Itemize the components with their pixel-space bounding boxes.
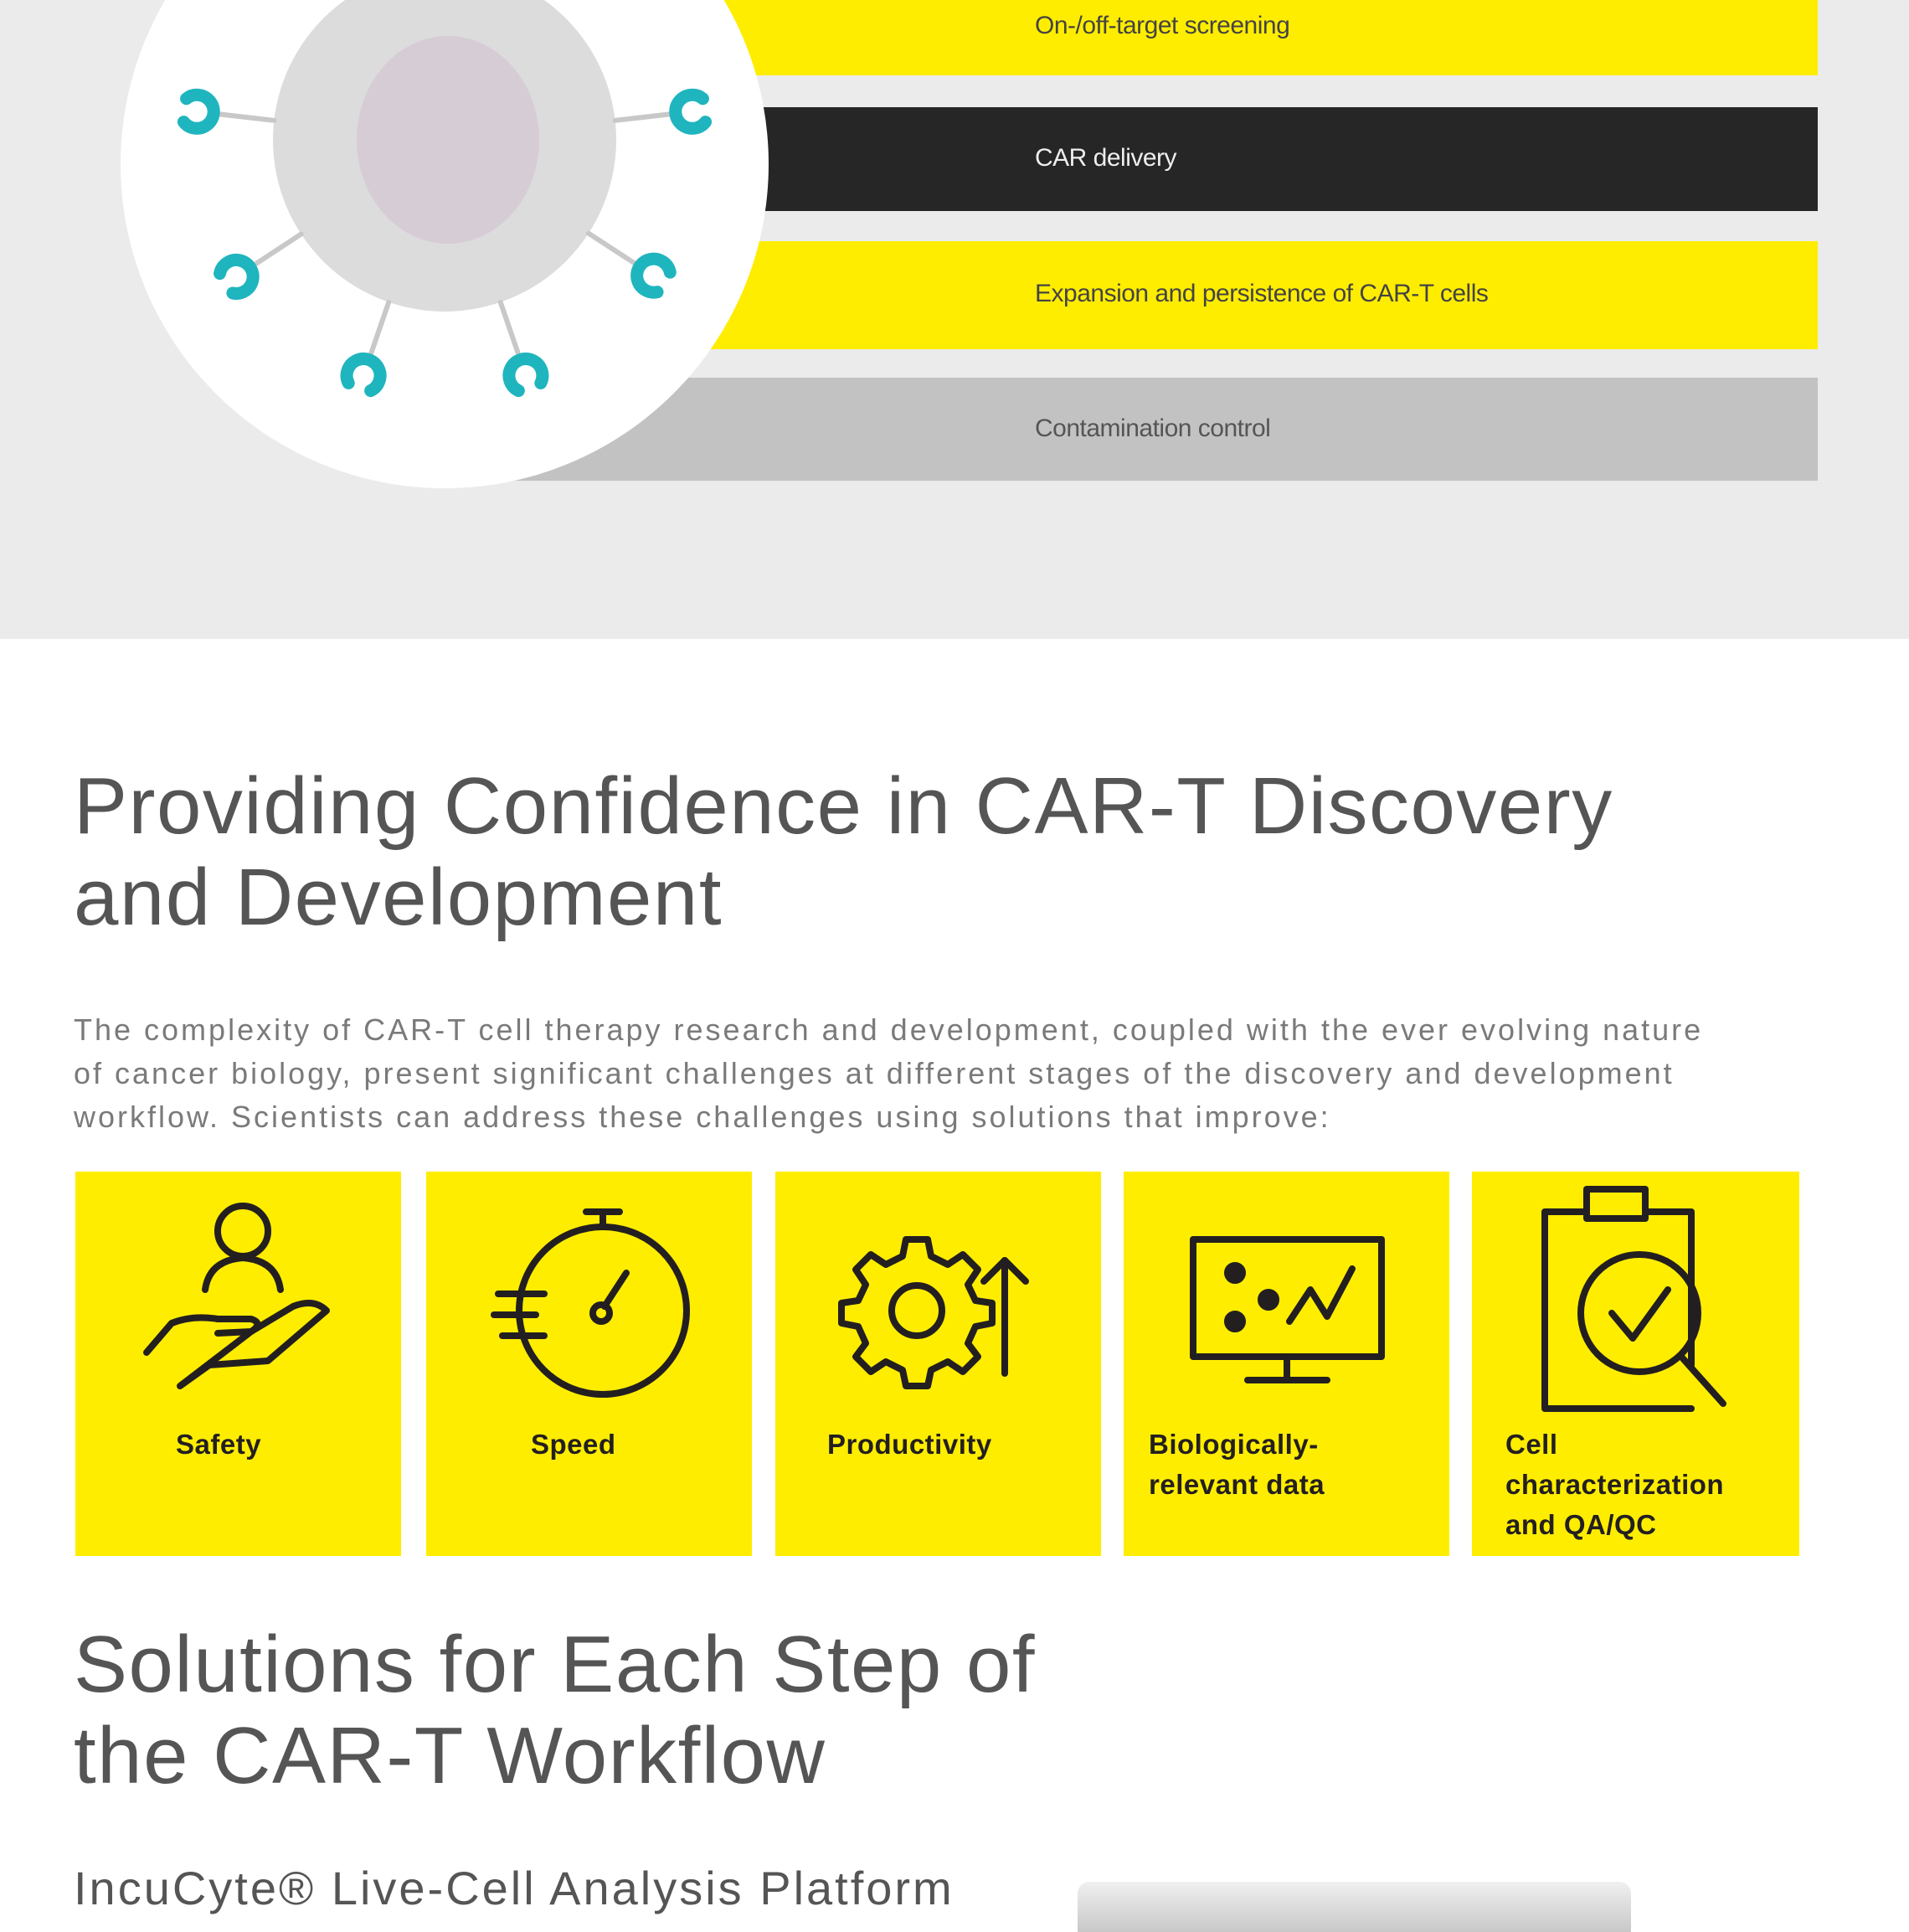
icons: five benefit icons (143, 1186, 1726, 1412)
bar: CAR delivery (754, 107, 1818, 211)
card: biologically-relevant data: Biologically- (1149, 1429, 1319, 1460)
heading: solutions: Solutions for Each Step of (74, 1620, 1036, 1709)
bar: expansion: Expansion and persistence of CAR-T cells (1035, 280, 1488, 307)
illustration: CAR-T cell (121, 0, 769, 488)
icon: clipboard magnifier (1545, 1189, 1723, 1409)
card: cell characterization: characterization (1505, 1469, 1724, 1500)
card: cell characterization (1472, 1172, 1799, 1556)
card: cell characterization: Cell (1505, 1429, 1558, 1460)
bar: expansion (670, 241, 1818, 349)
icon: safety hand (147, 1206, 327, 1386)
icon: monitor chart (1193, 1239, 1382, 1380)
card: speed: Speed (531, 1429, 616, 1460)
subheading: IncuCyte: IncuCyte® Live-Cell Analysis Platform (74, 1862, 954, 1914)
heading: solutions: the CAR-T Workflow (74, 1711, 826, 1801)
card: speed (426, 1172, 752, 1556)
card: cell characterization: and QA/QC (1505, 1509, 1657, 1540)
bar: contamination control: Contamination control (1035, 415, 1270, 442)
heading: providing confidence: and Development (74, 853, 723, 942)
text: intro paragraph: The complexity of CAR-T cell therapy research and development, coupled with the ever evolving nature (74, 1012, 1703, 1047)
image: instrument (1078, 1882, 1631, 1932)
text: intro paragraph (74, 1012, 1703, 1134)
card: safety: Safety (176, 1429, 261, 1460)
card: productivity (775, 1172, 1101, 1556)
text: intro paragraph: of cancer biology, present significant challenges at different stages of the discovery and development (74, 1056, 1675, 1090)
card: safety (75, 1172, 401, 1556)
panel: top gray background (0, 0, 1909, 639)
bar: on/off target screening: On-/off-target screening (1035, 12, 1289, 39)
icon: productivity gear (841, 1239, 1026, 1386)
icon: speed stopwatch (494, 1212, 687, 1394)
card: biologically-relevant data: relevant data (1149, 1469, 1325, 1500)
heading: providing confidence (74, 761, 1613, 942)
heading: solutions (74, 1620, 1036, 1801)
bar: on/off target screening (670, 0, 1818, 75)
text: intro paragraph: workflow. Scientists can address these challenges using solutions that improve: (74, 1100, 1331, 1134)
card: biologically-relevant data (1124, 1172, 1449, 1556)
bar: contamination control (502, 378, 1818, 481)
bar: CAR delivery: CAR delivery (1035, 144, 1176, 172)
heading: providing confidence: Providing Confidence in CAR-T Discovery (74, 761, 1613, 851)
card: productivity: Productivity (827, 1429, 992, 1460)
